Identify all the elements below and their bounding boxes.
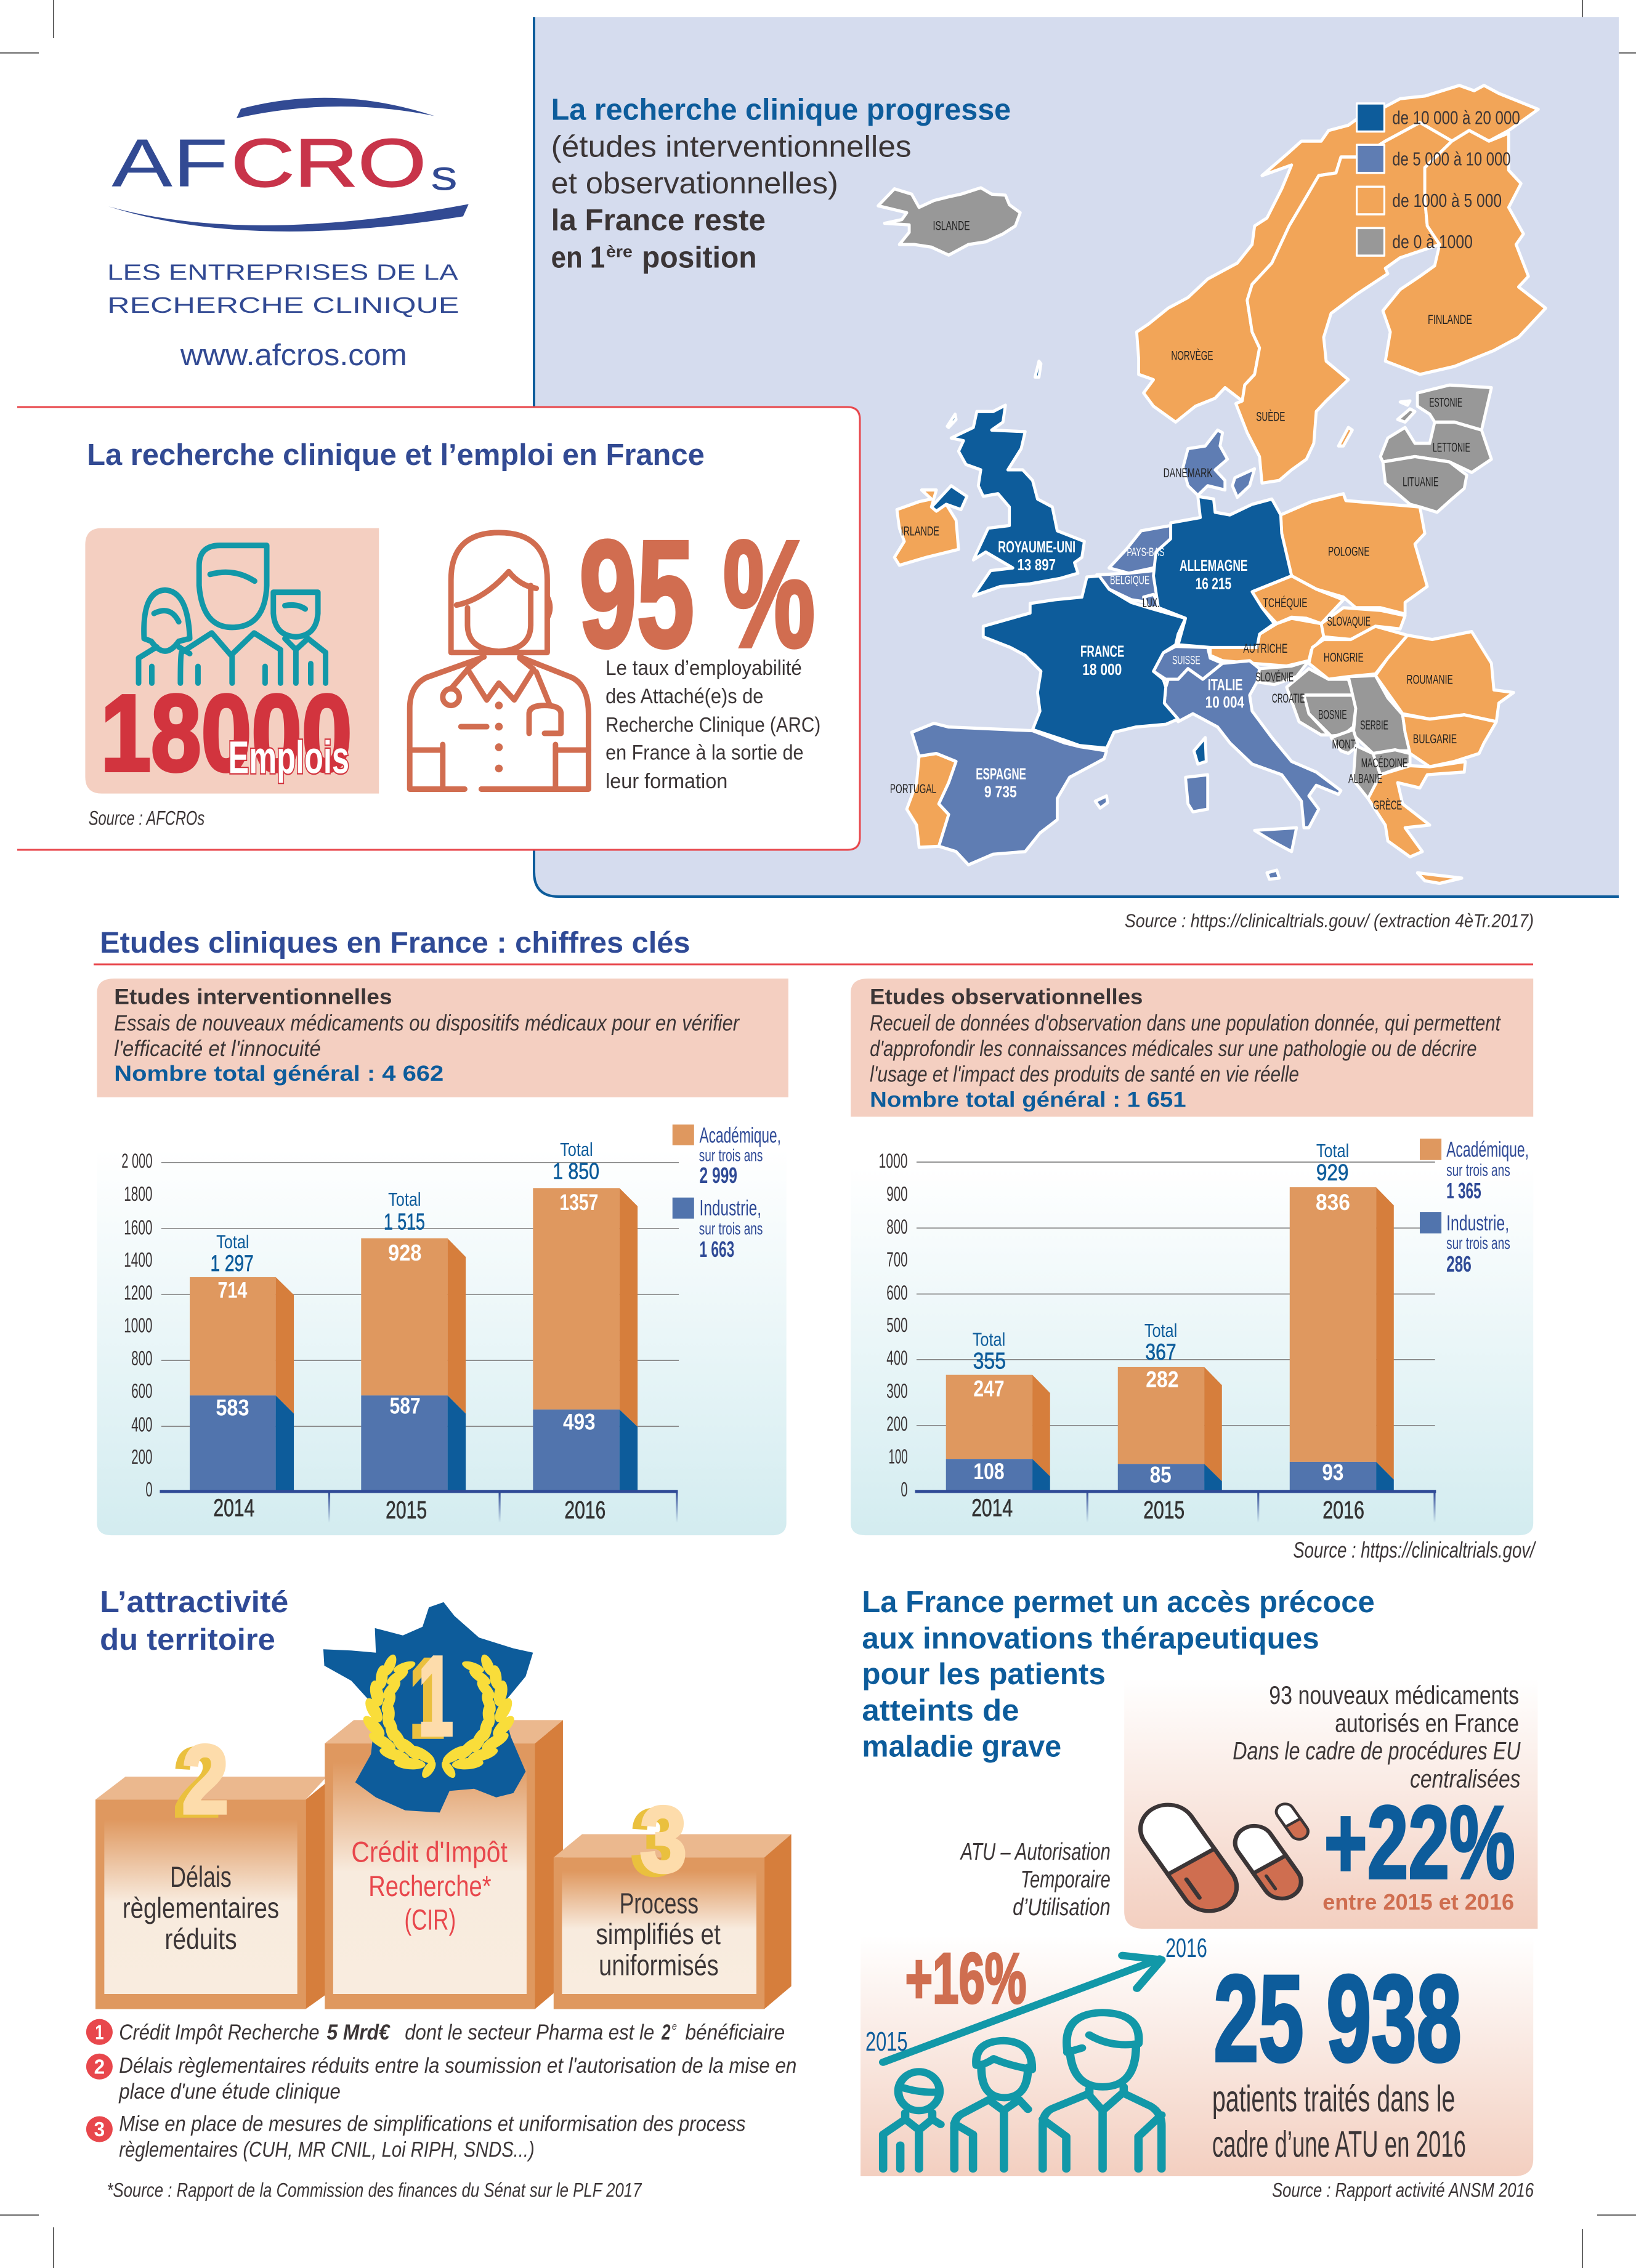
legend: sur trois ans	[1446, 1233, 1510, 1253]
y axis labels: 400	[886, 1347, 908, 1370]
text: ATU definition: ATU – Autorisation	[960, 1838, 1111, 1865]
x axis: 2014	[213, 1495, 254, 1522]
item 1: Crédit Impôt Recherche	[119, 2020, 320, 2044]
map country labels: ESTONIE	[1429, 395, 1462, 410]
source: ANSM: Source : Rapport activité ANSM 2016	[1272, 2179, 1534, 2201]
y axis labels	[121, 1149, 152, 1501]
legend: 286	[1446, 1252, 1472, 1277]
map country labels: ROUMANIE	[1407, 672, 1453, 687]
panel: employment white box	[17, 407, 860, 850]
stat caption: entre 2015 et 2016	[1322, 1890, 1514, 1915]
region: medium blue countries	[912, 430, 1341, 879]
bar 2015	[361, 1189, 466, 1491]
legend: 2 999	[700, 1163, 737, 1188]
x axis: 2014	[971, 1495, 1013, 1522]
x axis	[915, 1491, 1436, 1524]
stat: +16%: +16%	[905, 1939, 1026, 2019]
logo AFCROs: AF	[111, 126, 229, 201]
bar 2016: 1357	[559, 1189, 598, 1215]
map country labels: 9 735	[984, 783, 1017, 801]
map country labels: LETTONIE	[1433, 440, 1470, 455]
map country labels: SUISSE	[1172, 654, 1201, 668]
bar 2016: 836	[1316, 1189, 1350, 1215]
item 3: règlementaires (CUH, MR CNIL, Loi RIPH, SNDS...)	[119, 2137, 535, 2161]
map country labels: ALBANIE	[1348, 772, 1382, 786]
bar 2014: 247	[973, 1376, 1005, 1402]
y axis labels: 1000	[124, 1314, 152, 1337]
x axis: 2015	[1143, 1496, 1184, 1524]
description box: Etudes interventionnelles	[114, 985, 392, 1009]
item 3	[86, 2112, 745, 2161]
map country labels: SLOVÉNIE	[1255, 670, 1294, 685]
map title text: et observationnelles)	[551, 167, 838, 200]
bar 2014: 583	[216, 1395, 249, 1420]
box: nouveaux médicaments	[1124, 1679, 1537, 1929]
heading: attractivité: du territoire	[100, 1623, 275, 1657]
panel: études interventionnelles	[97, 926, 788, 1535]
podium block 2	[95, 1725, 326, 2009]
bar 2015: 1 515	[384, 1209, 425, 1234]
text: employabilité: en France à la sortie de	[605, 741, 804, 765]
y axis labels: 200	[886, 1413, 908, 1435]
panel: études observationnelles: 100	[888, 1445, 908, 1468]
panel: 18000 emplois	[85, 528, 379, 794]
bar 2015: 587	[390, 1393, 421, 1419]
region: dark blue countries	[931, 361, 1292, 764]
laurel wreath	[360, 1653, 518, 1780]
map country labels: PORTUGAL	[890, 781, 936, 796]
x axis: 2016	[564, 1496, 605, 1524]
map title text: ère	[606, 242, 633, 261]
map country labels: MACÉDOINE	[1361, 756, 1407, 770]
heading: accès précoce: aux innovations thérapeutiques	[862, 1621, 1319, 1655]
logo AFCROs: www.afcros.com	[180, 339, 407, 372]
bar 2015: 85	[1150, 1462, 1172, 1488]
legend: 1 663	[700, 1237, 734, 1262]
number 1	[409, 1632, 453, 1761]
y axis labels: 1200	[124, 1281, 152, 1304]
stat: 18000: 18000	[100, 672, 352, 794]
legend: 1 365	[1446, 1179, 1481, 1203]
heading: attractivité	[100, 1585, 288, 1657]
map country labels: BELGIQUE	[1110, 574, 1149, 587]
map country labels: LITUANIE	[1403, 475, 1439, 490]
bar 2015: 367	[1145, 1339, 1176, 1365]
map country labels: SERBIE	[1360, 718, 1388, 733]
x axis: 2015	[386, 1496, 427, 1524]
logo AFCROs: s	[431, 152, 458, 200]
y axis labels: 800	[131, 1347, 152, 1370]
description box	[97, 979, 788, 1097]
heading: accès précoce: pour les patients	[862, 1657, 1106, 1691]
bar 2015: Total	[1144, 1320, 1177, 1341]
text: employabilité: Recherche Clinique (ARC)	[605, 713, 820, 736]
bar 2016	[1290, 1140, 1394, 1491]
item 1: dont le secteur Pharma est le	[405, 2020, 654, 2044]
legend	[1420, 1137, 1529, 1277]
description box: l'usage et l'impact des produits de santé en vie réelle	[870, 1062, 1299, 1087]
heading: chiffres clés: Etudes cliniques en France : chiffres clés	[100, 926, 690, 959]
y axis labels: 600	[886, 1281, 908, 1304]
podium block 1: Recherche*	[368, 1870, 492, 1902]
bar 2014	[946, 1329, 1050, 1491]
bar 2015: Total	[388, 1189, 421, 1210]
map country labels: LUX.	[1143, 595, 1159, 610]
description box: Essais de nouveaux médicaments ou dispositifs médicaux pour en vérifier	[114, 1011, 740, 1035]
bar 2014: 108	[973, 1458, 1005, 1484]
map country labels: FRANCE	[1080, 643, 1124, 661]
logo AFCROs	[107, 98, 469, 372]
text: employabilité: leur formation	[605, 770, 727, 793]
y axis labels: 200	[131, 1445, 152, 1469]
y axis labels: 900	[886, 1182, 908, 1205]
box: nouveaux médicaments: autorisés en France	[1335, 1708, 1519, 1738]
podium block 1: Crédit d'Impôt	[351, 1836, 508, 1868]
item 2: Délais règlementaires réduits entre la soumission et l'autorisation de la mise en	[119, 2053, 796, 2077]
item 1: 2	[661, 2020, 671, 2044]
podium block 3	[554, 1788, 792, 2009]
map legend: de 5 000 à 10 000	[1392, 150, 1511, 170]
text: employabilité	[605, 656, 820, 793]
bar 2014	[190, 1232, 294, 1491]
text: employabilité: des Attaché(e)s de	[605, 685, 763, 708]
bar 2015: 928	[388, 1240, 421, 1265]
map country labels: CROATIE	[1272, 691, 1305, 706]
arrow	[883, 1956, 1162, 2062]
x axis	[160, 1491, 678, 1524]
map country labels: 10 004	[1205, 693, 1244, 711]
top left section content	[85, 93, 1011, 829]
label 2016: 2016	[1165, 1933, 1207, 1963]
map country labels: 18 000	[1082, 661, 1122, 679]
map legend: de 10 000 à 20 000	[1392, 108, 1520, 129]
podium block 3: simplifiés et	[596, 1918, 721, 1950]
description box: Etudes observationnelles	[870, 985, 1143, 1009]
panel: accès précoce	[861, 1585, 1537, 2201]
y axis labels: 2 000	[121, 1149, 152, 1172]
text: ATU definition	[960, 1838, 1111, 1920]
map title text: (études interventionnelles	[551, 130, 912, 163]
map country labels: ALLEMAGNE	[1180, 557, 1248, 575]
stat: 25 938: 25 938	[1213, 1950, 1462, 2088]
podium block 3: Process	[620, 1887, 699, 1919]
label 2015: 2015	[865, 2027, 908, 2056]
bar 2016: Total	[560, 1139, 593, 1160]
France map with laurel: 1	[418, 1632, 453, 1759]
podium block 2: réduits	[164, 1923, 237, 1956]
y axis labels: 300	[886, 1379, 908, 1402]
map country labels: BOSNIE	[1318, 708, 1347, 722]
map country labels: IRLANDE	[901, 524, 939, 539]
item 3: 3	[94, 2117, 105, 2141]
text: ATU definition: Temporaire	[1021, 1865, 1111, 1892]
heading: emploi: La recherche clinique et l’emploi en France	[87, 438, 705, 472]
box: patients ATU	[861, 1933, 1533, 2176]
source: Sénat: *Source : Rapport de la Commission des finances du Sénat sur le PLF 2017	[107, 2179, 642, 2201]
legend: sur trois ans	[699, 1145, 763, 1165]
map country labels: 16 215	[1196, 575, 1231, 593]
description box: Nombre total général : 4 662	[114, 1062, 443, 1086]
heading: accès précoce: La France permet un accès précoce	[862, 1585, 1375, 1619]
item 2: place d'une étude clinique	[118, 2079, 341, 2103]
number 2: 2	[174, 1728, 220, 1837]
number 1: 1	[409, 1635, 445, 1761]
icon: pills	[1130, 1796, 1311, 1920]
item 3: Mise en place de mesures de simplifications et uniformisation des process	[119, 2112, 745, 2136]
map country labels: ITALIE	[1208, 676, 1243, 694]
map legend: de 0 à 1000	[1392, 232, 1473, 252]
box: nouveaux médicaments: Dans le cadre de procédures EU	[1233, 1737, 1521, 1765]
map country labels: HONGRIE	[1324, 650, 1364, 665]
y axis labels: 800	[886, 1216, 908, 1238]
France map with laurel	[323, 1602, 533, 1812]
map legend	[1357, 103, 1520, 256]
legend: sur trois ans	[699, 1219, 763, 1238]
bar 2014: 1 297	[211, 1250, 254, 1276]
map country labels: BULGARIE	[1413, 732, 1457, 746]
map title text	[551, 93, 1011, 275]
map country labels	[890, 219, 1472, 813]
y axis labels: 0	[901, 1478, 908, 1501]
legend: Industrie,	[1446, 1211, 1509, 1235]
y axis labels: 1400	[124, 1248, 152, 1271]
map legend: de 1000 à 5 000	[1392, 191, 1502, 211]
panel: attractivité	[86, 1585, 796, 2201]
legend: Académique,	[700, 1124, 781, 1148]
y axis labels: 1000	[879, 1149, 908, 1172]
map country labels: DANEMARK	[1164, 466, 1213, 480]
podium block 3: uniformisés	[599, 1948, 719, 1982]
item 1	[86, 2019, 785, 2045]
bar 2016	[533, 1139, 638, 1491]
heading: accès précoce: atteints de	[862, 1693, 1019, 1727]
heading: accès précoce: maladie grave	[862, 1729, 1061, 1764]
map country labels: TCHÉQUIE	[1263, 595, 1308, 610]
map title text: La recherche clinique progresse	[551, 93, 1011, 127]
bar 2016: 493	[563, 1409, 596, 1435]
item 2	[86, 2053, 796, 2103]
number 3: 3	[640, 1788, 687, 1892]
description box: Nombre total général : 1 651	[870, 1088, 1186, 1112]
bar 2014: Total	[973, 1329, 1005, 1350]
panel: études observationnelles	[851, 910, 1536, 1563]
logo AFCROs: RECHERCHE CLINIQUE	[107, 293, 460, 318]
icon: patients	[883, 2012, 1162, 2169]
source: AFCROs: Source : AFCROs	[89, 807, 204, 829]
bar 2014: 714	[218, 1277, 247, 1303]
bar 2016: Total	[1316, 1140, 1349, 1161]
logo AFCROs: CRO	[231, 126, 426, 201]
bar 2015: 282	[1146, 1366, 1179, 1392]
stat: Emplois: Emplois	[229, 732, 349, 783]
chart background	[851, 1116, 1533, 1535]
chart background	[97, 1097, 787, 1535]
bar 2016: 929	[1316, 1160, 1348, 1185]
bar 2014: 355	[973, 1348, 1006, 1374]
region: orange countries	[894, 86, 1545, 884]
map country labels: 13 897	[1018, 556, 1056, 574]
bar 2014: Total	[216, 1232, 249, 1253]
legend: sur trois ans	[1446, 1160, 1510, 1180]
legend	[673, 1124, 781, 1262]
map title text: en 1	[551, 241, 605, 275]
map country labels: NORVÈGE	[1171, 349, 1213, 363]
description box	[851, 979, 1533, 1116]
item 1: 5 Mrd€	[326, 2020, 391, 2044]
map country labels: PAYS-BAS	[1127, 546, 1164, 559]
map title text: la France reste	[551, 204, 766, 237]
podium block 1	[325, 1720, 563, 2009]
map country labels: GRÈCE	[1373, 798, 1402, 813]
box: nouveaux médicaments: 93 nouveaux médicaments	[1269, 1681, 1519, 1709]
number 3: 3	[631, 1791, 678, 1895]
divider red line	[94, 963, 1533, 966]
y axis labels	[879, 1149, 908, 1501]
map country labels: MONT.	[1332, 737, 1357, 752]
x axis: 2016	[1322, 1496, 1364, 1524]
panel: map background	[534, 17, 1619, 897]
map country labels: POLOGNE	[1328, 544, 1369, 559]
y axis labels: 700	[886, 1248, 908, 1271]
map country labels: SUÈDE	[1256, 410, 1285, 424]
podium block 2: règlementaires	[123, 1892, 279, 1924]
item 2: 2	[94, 2055, 105, 2078]
podium block 2: Délais	[170, 1860, 232, 1894]
y axis labels: 600	[131, 1379, 152, 1402]
y axis labels: 1600	[124, 1216, 152, 1239]
description box: l'efficacité et l'innocuité	[114, 1036, 321, 1061]
item 1: e	[672, 2020, 677, 2032]
item 1: bénéficiaire	[685, 2020, 785, 2044]
bar 2016: 1 850	[553, 1158, 599, 1184]
heading: attractivité: L’attractivité	[100, 1585, 288, 1619]
map country labels: FINLANDE	[1428, 312, 1472, 327]
stat: +22%: +22%	[1324, 1785, 1515, 1900]
heading: accès précoce	[862, 1585, 1375, 1764]
y axis labels: 500	[886, 1314, 908, 1336]
map country labels: AUTRICHE	[1243, 641, 1287, 656]
map country labels: SLOVAQUIE	[1327, 614, 1371, 629]
bar 2016: 93	[1322, 1459, 1343, 1485]
map country labels: ESPAGNE	[976, 765, 1026, 783]
podium block 1: (CIR)	[404, 1903, 456, 1936]
map country labels: ROYAUME-UNI	[998, 538, 1075, 556]
icon: nurse	[410, 533, 588, 789]
stat caption: patients traités dans le	[1212, 2078, 1455, 2119]
map country labels: ISLANDE	[933, 219, 970, 233]
map title text: position	[642, 241, 757, 275]
box: nouveaux médicaments: centralisées	[1410, 1766, 1520, 1793]
text: employabilité: Le taux d’employabilité	[605, 656, 802, 680]
logo AFCROs: LES ENTREPRISES DE LA	[107, 259, 458, 285]
map panel border	[534, 17, 1619, 897]
bar 2015	[1118, 1320, 1222, 1491]
text: ATU definition: d’Utilisation	[1013, 1893, 1111, 1920]
stat: 95 %: 95 %	[579, 509, 815, 679]
list of advantages	[86, 2019, 796, 2161]
y axis labels: 1800	[124, 1182, 152, 1205]
item 1: 1	[95, 2020, 104, 2044]
y axis labels: 0	[145, 1478, 152, 1501]
legend: Académique,	[1446, 1137, 1529, 1162]
icon: team	[139, 546, 326, 683]
map of Europe	[878, 86, 1545, 884]
legend: Industrie,	[700, 1197, 761, 1221]
region: grey countries	[878, 188, 1491, 799]
y axis labels: 400	[131, 1413, 152, 1436]
number 2: 2	[182, 1725, 229, 1834]
